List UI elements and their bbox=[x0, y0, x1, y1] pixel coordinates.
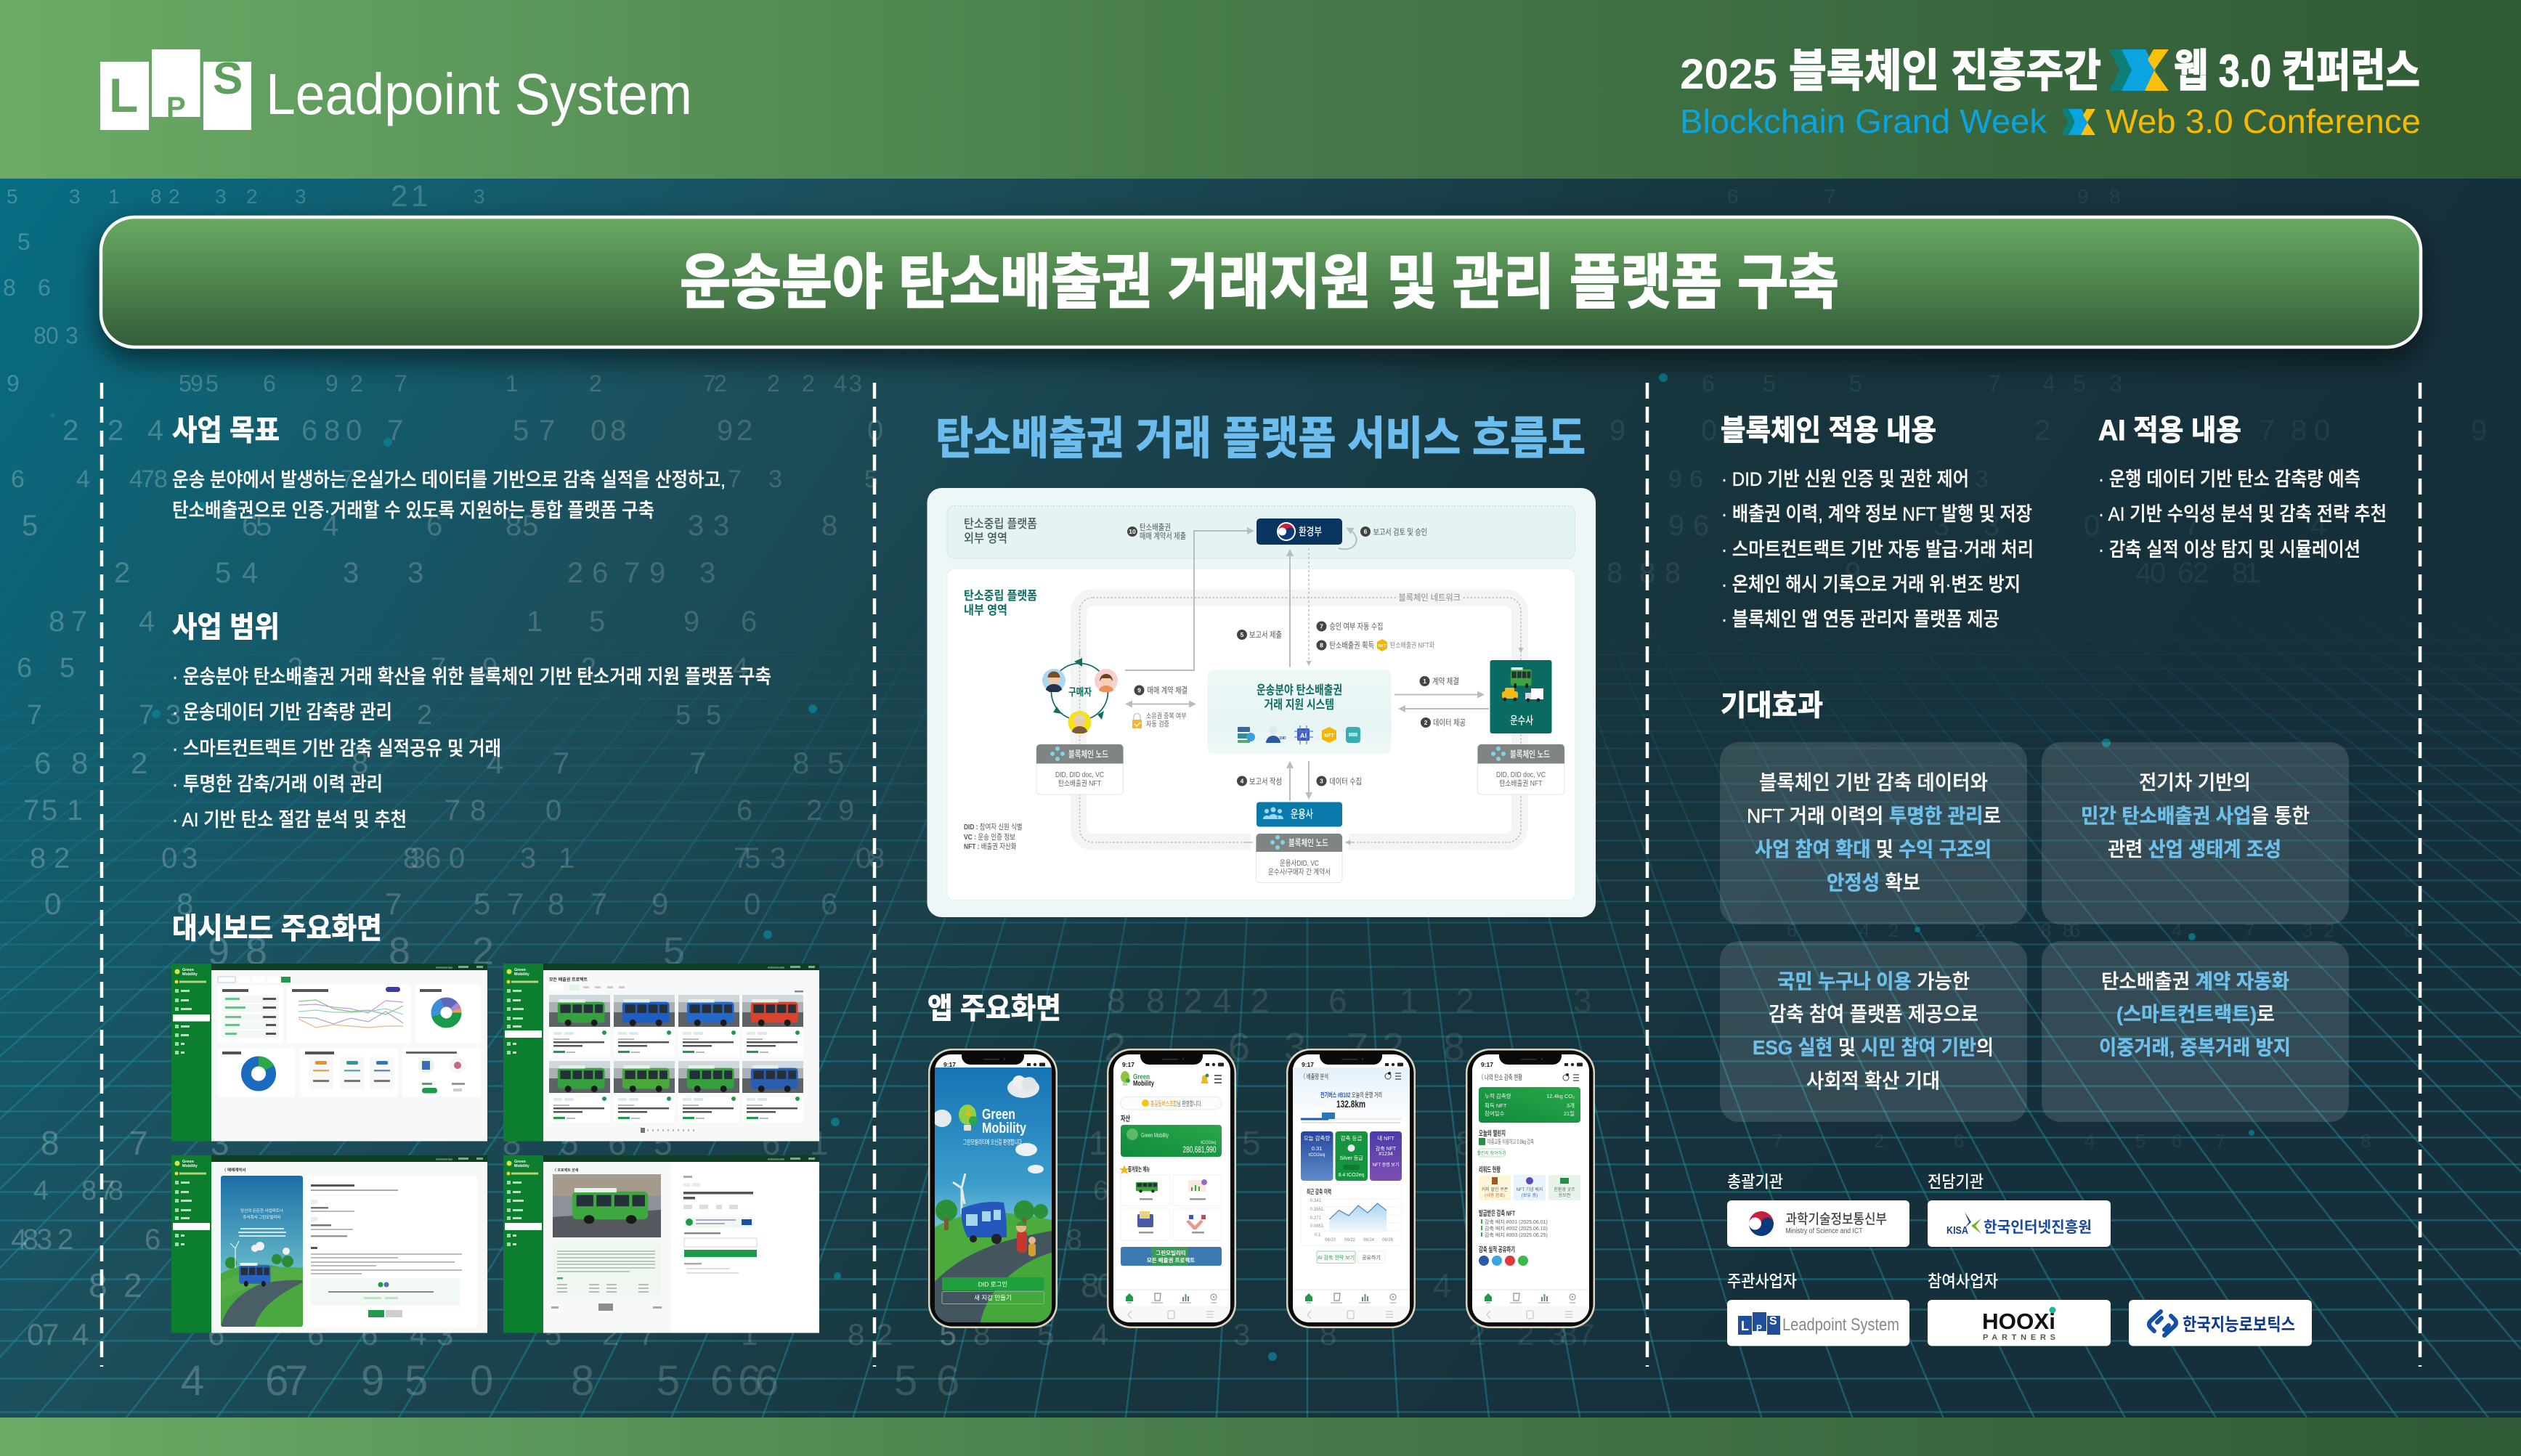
phone 1: splash bbox=[928, 1049, 1057, 1328]
text: 820383603175308 bbox=[30, 842, 885, 874]
header band bbox=[0, 0, 2521, 179]
phone 4: my reductions: 누적 감축량 bbox=[1485, 1092, 1511, 1099]
logo group: lead agency: 과학기술정보통신부 bbox=[1785, 1211, 1887, 1227]
text: 21 bbox=[391, 179, 428, 213]
section: business scope: · 운송데이터 기반 감축량 관리 bbox=[172, 701, 392, 723]
buyers bbox=[1042, 658, 1118, 734]
phone 3: emission analysis: NFT 증명 보기 bbox=[1373, 1162, 1399, 1168]
phone 3: emission analysis: 전기버스 #B102 오늘의 운행 거리 bbox=[1320, 1091, 1382, 1099]
card: effect 3: 사회적 확산 기대 bbox=[1806, 1070, 1940, 1092]
section: business goal: 운송 분야에서 발생하는 온실가스 데이터를 기반으로 감축 실적을 산정하고, bbox=[172, 469, 726, 491]
logo group: lead agency bbox=[1727, 1172, 1909, 1247]
phone 2: home: 280,681,990 bbox=[1182, 1144, 1217, 1155]
node: left: 탄소배출권 NFT bbox=[1058, 779, 1101, 788]
logo group: participants: HOOXi bbox=[1982, 1309, 2055, 1334]
logo group: dedicated agency: 전담기관 bbox=[1928, 1172, 1984, 1191]
legend: VC : 운송 인증 정보 bbox=[964, 833, 1015, 842]
section: AI features: · 감축 실적 이상 탐지 및 시뮬레이션 bbox=[2098, 539, 2360, 561]
logo group: lead operator: S bbox=[1769, 1315, 1777, 1327]
phone 4: my reductions bbox=[1466, 1049, 1595, 1328]
step 9: 9 bbox=[1137, 687, 1141, 694]
steps 3 4 bbox=[1237, 776, 1362, 786]
labels around ministry: 매매 계약서 제출 bbox=[1140, 531, 1186, 541]
phone 2: home: Green Mobility bbox=[1141, 1132, 1169, 1139]
section: AI features: · AI 기반 수익성 분석 및 감축 전략 추천 bbox=[2098, 503, 2387, 525]
phone 1: splash: Mobility bbox=[982, 1121, 1027, 1136]
box: asset manager: 운용사 bbox=[1291, 808, 1313, 821]
section: business scope: 사업 범위 bbox=[172, 611, 280, 643]
phone 4: my reductions: (보유 중) bbox=[1522, 1193, 1538, 1198]
logo: Leadpoint System: S bbox=[213, 54, 243, 104]
operator company box bbox=[1490, 660, 1551, 733]
phone 3: emission analysis: 공유하기 bbox=[1362, 1254, 1381, 1261]
labels around ministry: 6 bbox=[1364, 528, 1368, 535]
section: business scope: · 투명한 감축/거래 이력 관리 bbox=[172, 773, 383, 795]
text: 644787735963 bbox=[11, 465, 1989, 493]
external area bbox=[947, 505, 1575, 558]
text: 72645678 bbox=[1772, 1130, 2371, 1152]
steps 5 7 8 bbox=[1237, 622, 1434, 651]
phone 3: emission analysis: 0.31 bbox=[1312, 1145, 1322, 1152]
phone 2: home: 자산 bbox=[1121, 1114, 1130, 1123]
dashboard screen 3: 〈 매매계약서 bbox=[222, 1167, 245, 1173]
phone 4: my reductions: 리워드 현황 bbox=[1479, 1166, 1501, 1174]
steps 1 2 bbox=[1419, 676, 1466, 728]
section: business goal: 사업 목표 bbox=[172, 415, 280, 447]
phone 4: my reductions: 12.4kg CO₂ bbox=[1546, 1093, 1575, 1099]
external area: 탄소중립 플랫폼 bbox=[964, 517, 1037, 531]
central system box: DID bbox=[1280, 736, 1286, 741]
phone 4: my reductions: 감축 배지 #003 (2025.06.25) bbox=[1485, 1232, 1548, 1238]
text: 483268 bbox=[11, 1224, 1082, 1256]
phone 3: emission analysis: 0.341 bbox=[1310, 1199, 1322, 1203]
text: 0875787906 bbox=[44, 887, 837, 921]
section: business scope: · 운송분야 탄소배출권 거래 확산을 위한 블록체인 기반 탄소거래 지원 플랫폼 구축 bbox=[172, 666, 771, 688]
text: 751780629 bbox=[23, 794, 854, 826]
conference title bbox=[1680, 46, 2421, 140]
node: right: 탄소배출권 NFT bbox=[1499, 779, 1543, 788]
steps 1 2: 계약 체결 bbox=[1432, 676, 1459, 686]
node: bottom: 운용사DID, VC bbox=[1280, 859, 1319, 868]
section: business goal: 탄소배출권으로 인증·거래할 수 있도록 지원하는 통합 플랫폼 구축 bbox=[172, 500, 654, 521]
section: business scope bbox=[172, 611, 771, 831]
central system box: 거래 지원 시스템 bbox=[1264, 698, 1334, 712]
logo group: participants: 한국지능로보틱스 bbox=[2183, 1315, 2295, 1335]
text: 25433267938889406281 bbox=[114, 557, 2260, 589]
conference title: 2025 bbox=[1680, 51, 1777, 98]
operator company box: 운수사 bbox=[1510, 715, 1533, 727]
card: effect 3: 국민 누구나 이용 가능한 bbox=[1777, 970, 1970, 993]
section: blockchain features bbox=[1721, 415, 2034, 630]
phone 3: emission analysis: 0.271 bbox=[1310, 1216, 1322, 1221]
logo: Leadpoint System bbox=[100, 49, 692, 130]
text: 98825 bbox=[208, 930, 685, 973]
text: 224680757089209027809 bbox=[62, 415, 2487, 447]
steps 1 2: 데이터 제공 bbox=[1433, 718, 1466, 728]
internal area: 탄소중립 플랫폼 bbox=[964, 589, 1037, 603]
labels around ministry bbox=[1127, 523, 1427, 541]
phone 1: splash: Green bbox=[982, 1107, 1015, 1123]
text: 6527924 bbox=[17, 653, 748, 683]
dashboard screen 1 bbox=[171, 964, 487, 1142]
buyers: 구매자 bbox=[1068, 686, 1092, 698]
dashboard screen 3: 주식회사 그린모빌리티 bbox=[243, 1214, 281, 1220]
text: 263728 bbox=[1104, 1025, 1465, 1069]
text: 803 bbox=[33, 322, 78, 349]
heading: dashboard screens: 대시보드 주요화면 bbox=[172, 913, 382, 945]
phone 3: emission analysis: 〈 배출량 분석 bbox=[1301, 1073, 1328, 1081]
text: 4679508566656 bbox=[181, 1357, 959, 1404]
phone 2: home: tCO2eq bbox=[1201, 1141, 1216, 1145]
text: 8741596 bbox=[49, 606, 757, 638]
card: effect 2 bbox=[2042, 742, 2349, 924]
logo group: lead operator: P bbox=[1756, 1323, 1762, 1333]
steps 5 7 8: 승인 여부 자동 수집 bbox=[1329, 622, 1383, 632]
heading: service flow: 탄소배출권 거래 플랫폼 서비스 흐름도 bbox=[935, 414, 1586, 464]
logo group: dedicated agency: 한국인터넷진흥원 bbox=[1984, 1219, 2092, 1236]
phone 3: emission analysis bbox=[1286, 1049, 1416, 1328]
text: 5 bbox=[17, 229, 31, 255]
text: 773255 bbox=[27, 700, 721, 731]
text: 82804 bbox=[89, 1266, 1452, 1304]
phone 4: my reductions: 응모권 bbox=[1559, 1192, 1570, 1198]
text: 48786 bbox=[33, 1176, 1108, 1206]
phone 3: emission analysis: 최근 감축 이력 bbox=[1307, 1188, 1331, 1195]
section: blockchain features: · 블록체인 앱 연동 관리자 플랫폼 제공 bbox=[1721, 609, 2000, 630]
phone 2: home: 모든 배출권 프로젝트 bbox=[1147, 1256, 1195, 1264]
card: effect 1: 블록체인 기반 감축 데이터와 bbox=[1759, 771, 1988, 794]
phone 3: emission analysis: 0.3551 bbox=[1310, 1208, 1324, 1212]
node: left: 블록체인 노드 bbox=[1068, 749, 1108, 760]
steps 5 7 8: 5 bbox=[1241, 631, 1244, 638]
node: bottom bbox=[1257, 834, 1342, 883]
phone 3: emission analysis: 감축 등급 bbox=[1341, 1134, 1362, 1142]
dashboard screen 3 bbox=[171, 1155, 487, 1333]
card: effect 1: 사업 참여 확대 및 수익 구조의 bbox=[1755, 838, 1992, 861]
phone 3: emission analysis: Silver 등급 bbox=[1339, 1155, 1363, 1161]
text: 882426123 bbox=[1107, 982, 1592, 1020]
phone 2: home: Mobility bbox=[1133, 1080, 1154, 1088]
phone 3: emission analysis: AI 감축 전략 보기 bbox=[1318, 1254, 1355, 1261]
steps 3 4: 보고서 작성 bbox=[1249, 777, 1282, 786]
logo group: lead operator: Leadpoint System bbox=[1782, 1315, 1899, 1335]
phone 2: home: Green bbox=[1133, 1073, 1150, 1081]
phone 4: my reductions: 대중교통 이용하고 0.8kg 감축 bbox=[1487, 1138, 1534, 1145]
text: 682847785 bbox=[34, 746, 844, 780]
card: effect 1: 안정성 확보 bbox=[1827, 871, 1920, 894]
step 9: 자동 검증 bbox=[1146, 720, 1169, 729]
conference title: 블록체인 진흥주간 bbox=[1789, 46, 2101, 97]
steps 1 2: 2 bbox=[1424, 719, 1428, 726]
central system box bbox=[1206, 669, 1392, 755]
logo group: dedicated agency: KISA bbox=[1946, 1224, 1968, 1237]
box: asset manager bbox=[1257, 802, 1342, 826]
phone 3: emission analysis: 0.1 bbox=[1315, 1233, 1321, 1237]
phone 4: my reductions: 친환경 굿즈 bbox=[1554, 1187, 1575, 1192]
steps 3 4: 3 bbox=[1320, 777, 1323, 784]
card: effect 1: NFT 거래 이력의 투명한 관리로 bbox=[1747, 805, 2001, 827]
node: bottom: 운수사/구매자 간 계약서 bbox=[1268, 868, 1331, 877]
logo: Leadpoint System: P bbox=[166, 91, 186, 123]
logo group: participants: PARTNERS bbox=[1983, 1333, 2055, 1342]
card: effect 4: (스마트컨트랙트)로 bbox=[2116, 1003, 2275, 1025]
central system box: AI bbox=[1300, 732, 1307, 739]
text: 07466643527182558543822387 bbox=[27, 1317, 1594, 1351]
central system box: NFT bbox=[1324, 733, 1335, 739]
steps 1 2: 1 bbox=[1423, 678, 1426, 685]
card: effect 3: ESG 실현 및 시민 참여 기반의 bbox=[1753, 1036, 1994, 1059]
box: ministry of environment bbox=[1257, 518, 1342, 545]
internal area bbox=[947, 569, 1575, 900]
phone 2: home: 즐겨찾는 메뉴 bbox=[1128, 1166, 1150, 1173]
steps 5 7 8: 7 bbox=[1320, 623, 1323, 630]
phone 3: emission analysis: 06/22 bbox=[1344, 1238, 1356, 1243]
phone 2: home bbox=[1107, 1049, 1236, 1328]
steps 5 7 8: 8 bbox=[1320, 642, 1323, 649]
card: effect 4 bbox=[2042, 941, 2349, 1122]
card: effect 2: 관련 산업 생태계 조성 bbox=[2108, 838, 2281, 861]
conference title: Blockchain Grand Week bbox=[1680, 102, 2047, 140]
phone 3: emission analysis: 0.0851 bbox=[1310, 1224, 1324, 1229]
steps 5 7 8: 탄소배출권 획득 bbox=[1329, 640, 1374, 651]
central system box: 운송분야 탄소배출권 bbox=[1257, 683, 1342, 697]
steps 5 7 8: NFT bbox=[1379, 644, 1387, 648]
text: 86 bbox=[3, 274, 51, 301]
legend bbox=[964, 823, 1023, 851]
heading: expected effects: 기대효과 bbox=[1721, 690, 1823, 722]
text: 56546853389633074 bbox=[22, 510, 2326, 542]
phone 3: emission analysis: 132.8km bbox=[1336, 1099, 1365, 1110]
node: left: DID, DID doc, VC bbox=[1055, 770, 1104, 779]
arrows bbox=[1125, 529, 1489, 801]
card: effect 2: 민간 탄소배출권 사업을 통한 bbox=[2081, 805, 2310, 827]
phone 3: emission analysis: 8.4 tCO2eq bbox=[1339, 1173, 1365, 1178]
phone 4: my reductions: 감축 배지 #001 (2025.06.01) bbox=[1485, 1219, 1548, 1225]
step 9: 소유권 중복 여부 bbox=[1146, 712, 1187, 720]
dashboard screen 2 bbox=[503, 964, 819, 1142]
node: right: DID, DID doc, VC bbox=[1496, 770, 1546, 779]
phone 3: emission analysis: 06/24 bbox=[1363, 1238, 1375, 1243]
logo group: lead agency: Ministry of Science and ICT bbox=[1785, 1227, 1862, 1235]
legend: NFT : 배출권 자산화 bbox=[964, 842, 1017, 851]
section: AI features: AI 적용 내용 bbox=[2098, 415, 2241, 447]
phone 3: emission analysis: tCO2eq bbox=[1309, 1152, 1326, 1158]
phone 3: emission analysis: 내 NFT bbox=[1377, 1135, 1395, 1142]
phone 4: my reductions: 커피 할인 쿠폰 bbox=[1482, 1187, 1509, 1192]
blockchain network ring: 블록체인 네트워크 bbox=[1399, 593, 1461, 603]
text: 95956927127222436557453 bbox=[7, 370, 2122, 396]
phone 1: splash: 새 지갑 만들기 bbox=[974, 1294, 1012, 1301]
box: ministry of environment: 환경부 bbox=[1299, 526, 1322, 538]
conference title: Web 3.0 Conference bbox=[2106, 102, 2421, 140]
phone 4: my reductions: 〈 나의 탄소 감축 현황 bbox=[1479, 1073, 1522, 1082]
logo group: lead operator bbox=[1727, 1272, 1909, 1346]
step 9 bbox=[1132, 686, 1188, 729]
logo group: lead agency: 총괄기관 bbox=[1727, 1172, 1783, 1191]
section: AI features bbox=[2098, 415, 2387, 561]
step 9: 매매 계약 체결 bbox=[1148, 686, 1188, 696]
phone 3: emission analysis: #1234 bbox=[1379, 1152, 1393, 1157]
section: AI features: · 운행 데이터 기반 탄소 감축량 예측 bbox=[2098, 468, 2360, 490]
phone 1: splash: 그린모빌리티에 오신걸 환영합니다 bbox=[963, 1138, 1022, 1146]
logo group: participants bbox=[1928, 1272, 2312, 1346]
node: right bbox=[1477, 744, 1564, 794]
bottom band bbox=[0, 1418, 2521, 1456]
logo group: participants: 참여사업자 bbox=[1928, 1272, 1998, 1290]
text: 288642064273 bbox=[1787, 919, 2414, 941]
card: effect 4: 탄소배출권 계약 자동화 bbox=[2101, 970, 2289, 993]
heading: app screens: 앱 주요화면 bbox=[927, 993, 1061, 1025]
external area: 외부 영역 bbox=[964, 532, 1007, 545]
panel: service flow diagram bbox=[927, 488, 1596, 917]
section: business scope: · AI 기반 탄소 절감 분석 및 추천 bbox=[172, 809, 407, 831]
phone 3: emission analysis: 오늘 감축량 bbox=[1304, 1134, 1330, 1142]
phone 1: splash: DID 로그인 bbox=[978, 1281, 1007, 1288]
phone 2: home: 홍길동버스조합님 환영합니다. bbox=[1150, 1099, 1202, 1107]
dashboard screen 3: 당신의 든든한 사업파트너 bbox=[240, 1208, 283, 1213]
dashboard screen 4: 〈 프로젝트 상세 bbox=[553, 1168, 579, 1173]
phone 4: my reductions: 획득 NFT bbox=[1485, 1102, 1507, 1109]
phone 4: my reductions: 감축 배지 #002 (2025.06.10) bbox=[1485, 1225, 1548, 1232]
section: blockchain features: 블록체인 적용 내용 bbox=[1721, 415, 1936, 447]
steps 5 7 8: 보고서 제출 bbox=[1249, 630, 1282, 640]
section: blockchain features: · 배출권 이력, 계약 정보 NFT 발행 및 저장 bbox=[1721, 503, 2032, 525]
legend: DID : 참여자 신원 식별 bbox=[964, 823, 1023, 831]
phone 4: my reductions: 감축 실적 공유하기 bbox=[1479, 1245, 1515, 1254]
card: effect 3: 감축 참여 플랫폼 제공으로 bbox=[1769, 1003, 1978, 1025]
phone 4: my reductions: NFT 기념 배지 bbox=[1517, 1187, 1543, 1192]
section: blockchain features: · 온체인 해시 기록으로 거래 위·변조 방지 bbox=[1721, 574, 2021, 595]
text: 5318232336798 bbox=[7, 185, 2121, 208]
phone 4: my reductions: 챌린지 참여하기 bbox=[1477, 1150, 1506, 1156]
node: bottom: 블록체인 노드 bbox=[1288, 838, 1328, 848]
title banner bbox=[101, 217, 2421, 347]
card: effect 3 bbox=[1720, 941, 2027, 1122]
logo group: lead operator: 주관사업자 bbox=[1727, 1272, 1797, 1290]
text: 187385656158 bbox=[41, 1124, 1474, 1162]
labels around ministry: 탄소배출권 bbox=[1140, 523, 1171, 532]
dashboard screen 2: 모든 배출권 프로젝트 bbox=[549, 977, 588, 983]
blockchain network ring bbox=[1079, 592, 1521, 854]
labels around ministry: 보고서 검토 및 승인 bbox=[1373, 527, 1427, 537]
phone 3: emission analysis: 06/20 bbox=[1325, 1238, 1336, 1243]
phone 4: my reductions: 참여일수 bbox=[1485, 1110, 1505, 1117]
dashboard screen 4 bbox=[503, 1155, 819, 1333]
logo group: dedicated agency bbox=[1928, 1172, 2111, 1247]
node: right: 블록체인 노드 bbox=[1510, 749, 1550, 760]
logo: Leadpoint System: Leadpoint System bbox=[266, 62, 692, 126]
steps 3 4: 4 bbox=[1241, 777, 1244, 784]
phone 4: my reductions: (사용 완료) bbox=[1485, 1192, 1505, 1198]
internal area: 내부 영역 bbox=[964, 603, 1007, 617]
labels around ministry: 10 bbox=[1129, 528, 1136, 535]
conference title: 웹 3.0 컨퍼런스 bbox=[2174, 46, 2420, 97]
section: business scope: · 스마트컨트랙트 기반 감축 실적공유 및 거래 bbox=[172, 738, 501, 760]
node: left bbox=[1036, 744, 1123, 794]
title banner: 운송분야 탄소배출권 거래지원 및 관리 플랫폼 구축 bbox=[680, 250, 1839, 316]
section: blockchain features: · DID 기반 신원 인증 및 권한 제어 bbox=[1721, 468, 1969, 490]
phone 3: emission analysis: 감축 NFT bbox=[1376, 1145, 1397, 1152]
phone 4: my reductions: 발급받은 감축 NFT bbox=[1479, 1209, 1515, 1218]
card: effect 1 bbox=[1720, 742, 2027, 924]
phone 4: my reductions: 오늘의 챌린지 bbox=[1479, 1129, 1506, 1138]
steps 3 4: 데이터 수집 bbox=[1329, 777, 1362, 786]
section: business goal bbox=[172, 415, 726, 521]
section: blockchain features: · 스마트컨트랙트 기반 자동 발급·거래 처리 bbox=[1721, 539, 2034, 561]
phone 4: my reductions: 3개 bbox=[1567, 1102, 1575, 1109]
phone 4: my reductions: 21일 bbox=[1564, 1110, 1575, 1117]
steps 5 7 8: 탄소배출권 NFT화 bbox=[1390, 641, 1434, 650]
logo group: lead operator: L bbox=[1741, 1319, 1749, 1333]
logo: Leadpoint System: L bbox=[109, 68, 138, 122]
phone 2: home: 그린모빌리티 bbox=[1156, 1249, 1186, 1256]
phone 3: emission analysis: 06/26 bbox=[1382, 1238, 1394, 1243]
card: effect 4: 이중거래, 중복거래 방지 bbox=[2099, 1036, 2291, 1059]
card: effect 2: 전기차 기반의 bbox=[2139, 771, 2251, 794]
